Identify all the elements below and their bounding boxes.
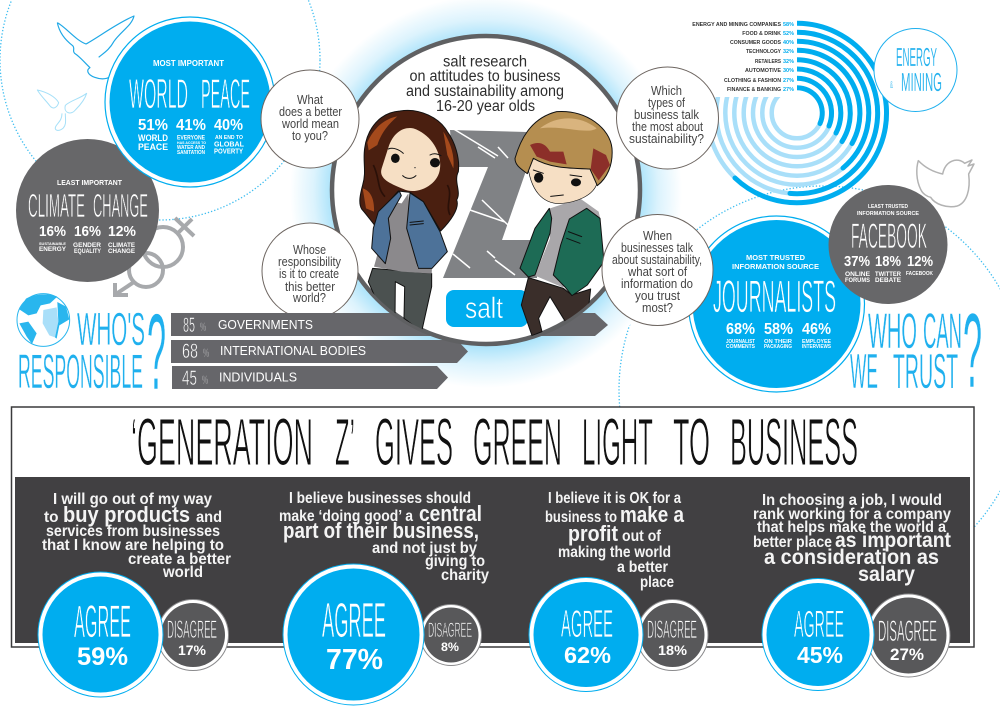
callout: energy and mining: MINING xyxy=(901,67,942,97)
icon: small dove xyxy=(37,90,87,130)
statement: buy products: buy products xyxy=(63,502,190,527)
title: salt research intro: and sustainability among xyxy=(406,83,564,100)
icon: gender symbols xyxy=(115,218,194,295)
result 3: disagree 18% xyxy=(637,600,708,670)
stat: 51% world peace: PEACE xyxy=(138,142,168,153)
statement: central part of business: make ‘doing good’ a xyxy=(279,508,413,525)
result 2: agree 77%: 77% xyxy=(326,644,383,676)
label: least trusted information source: INFORMATION SOURCE xyxy=(857,211,919,217)
title: salt research intro: on attitudes to business xyxy=(410,68,561,85)
question bubble: when businesses talk: you trust xyxy=(635,289,680,303)
arrow bar: international bodies xyxy=(171,340,468,363)
stat: 16% gender equality xyxy=(73,223,102,255)
stat: 12% climate change xyxy=(108,223,136,255)
question bubble: what does a better world mean: does a better xyxy=(279,105,342,119)
heading: climate change: CLIMATE xyxy=(28,187,85,224)
bar labels: responsibility percentages xyxy=(182,314,366,390)
title: generation z gives green light to business: Z’ xyxy=(335,405,355,480)
heading: who can we trust xyxy=(850,292,982,410)
heading: who's responsible xyxy=(18,291,166,412)
statement: buy products: world xyxy=(162,564,203,581)
statement: buy products xyxy=(42,491,231,581)
text: ? xyxy=(147,291,166,412)
result 1: agree 59%: AGREE xyxy=(74,596,131,647)
question bubble: when businesses talk: most? xyxy=(642,301,673,315)
chart labels: sectors and percentages: FOOD & DRINK xyxy=(742,31,781,37)
question bubble: which types of business: sustainability? xyxy=(629,132,704,146)
question bubble: which types of business: business talk xyxy=(634,108,700,122)
text: DISAGREE xyxy=(647,616,697,644)
statement: central part of business: I believe businesses should xyxy=(289,490,471,507)
title: salt research intro: 16-20 year olds xyxy=(436,98,535,115)
heading: who's responsible: WHO'S xyxy=(77,303,145,355)
question bubble: when businesses talk: about sustainability, xyxy=(612,253,702,267)
stat: 46% employee interviews: EMPLOYEE xyxy=(802,339,832,345)
icon: globe xyxy=(17,294,70,346)
statement: make a profit: a better xyxy=(617,559,668,576)
statement: as important as salary: as important xyxy=(835,529,951,552)
stat: 41% water and sanitation: HAS ACCESS TO xyxy=(177,141,206,145)
question bubble: whose responsibility: is it to create xyxy=(279,267,339,281)
statement: make a profit: out of xyxy=(622,528,662,545)
heading: world peace: WORLD xyxy=(129,70,188,117)
stat: 40% end to global poverty: POVERTY xyxy=(214,148,243,156)
result 3: agree 62%: 62% xyxy=(564,642,611,668)
statement: buy products: services from businesses xyxy=(46,523,220,540)
illustration: boy xyxy=(515,112,612,338)
stat: 12% facebook: 12% xyxy=(907,254,933,270)
stat: 40% end to global poverty xyxy=(214,117,244,156)
panel: most important xyxy=(105,17,275,187)
bar labels: responsibility percentages: 68 xyxy=(182,340,198,363)
label: most trusted information source: INFORMATION SOURCE xyxy=(732,262,819,271)
chart: business sustainability rings xyxy=(707,23,887,203)
chart labels: sectors and percentages: 27% xyxy=(783,78,794,84)
arrow bar: individuals xyxy=(172,366,448,389)
stat: 41% water and sanitation: EVERYONE xyxy=(177,136,205,142)
result 4: agree 45% xyxy=(762,578,874,690)
stat: 37% online forums xyxy=(844,254,870,284)
question bubble: when businesses talk: When xyxy=(643,229,672,243)
stat: 16% sustainable energy: 16% xyxy=(39,223,66,240)
stat: 16% sustainable energy: SUSTAINABLE xyxy=(39,242,66,246)
stat: 12% climate change: CLIMATE xyxy=(108,243,135,249)
heading: who can we trust: WE xyxy=(850,345,878,399)
result 1: agree 59% xyxy=(38,572,163,697)
illustration: girl xyxy=(360,110,459,332)
statement: as important as salary: rank working for a company xyxy=(753,506,951,523)
chart labels: sectors and percentages: TECHNOLOGY xyxy=(746,49,781,55)
result 4: agree 45%: 45% xyxy=(797,642,843,668)
result 4: disagree 27%: 27% xyxy=(890,645,924,664)
stat: 68% journalist comments: JOURNALIST xyxy=(726,339,755,345)
result 3: agree 62%: AGREE xyxy=(561,603,613,646)
stat: 18% twitter debate: DEBATE xyxy=(875,278,901,284)
statement: central part of business: central xyxy=(419,501,482,526)
statement: make a profit: place xyxy=(640,574,674,591)
statement: make a profit xyxy=(545,490,685,591)
icon: twitter bird xyxy=(917,160,974,207)
panel: central illustration circle xyxy=(332,36,640,344)
panel: least trusted xyxy=(828,185,948,304)
bar labels: responsibility percentages: 45 xyxy=(182,367,197,390)
arrow bar: governments xyxy=(171,313,608,336)
question bubble: which types of business: types of xyxy=(648,96,685,110)
graphic: grey letter z xyxy=(443,128,537,278)
question bubble: whose responsibility xyxy=(262,223,358,319)
panel: least important xyxy=(16,139,159,282)
chart labels: sectors and percentages: 52% xyxy=(783,31,794,37)
stat: 51% world peace: WORLD xyxy=(138,133,168,144)
bar labels: responsibility percentages: % xyxy=(200,320,206,334)
question bubble: whose responsibility: Whose xyxy=(293,243,326,257)
chart labels: sectors and percentages: 58% xyxy=(783,22,794,28)
stat: 41% water and sanitation: WATER AND xyxy=(177,145,205,151)
stat: 58% on their packaging: 58% xyxy=(764,321,793,338)
text: DISAGREE xyxy=(428,619,472,642)
statement: central part of business: part of their business, xyxy=(283,518,479,543)
question bubble: what does a better world mean xyxy=(261,70,359,168)
statement: as important as salary: salary xyxy=(858,563,915,586)
text: DISAGREE xyxy=(167,616,217,644)
stat: 16% sustainable energy xyxy=(39,223,67,253)
chart labels: sectors and percentages: 32% xyxy=(783,59,794,65)
statement: as important as salary: In choosing a job, I would xyxy=(762,492,942,509)
label: most trusted information source: MOST TRUSTED xyxy=(746,253,806,262)
stat: 16% gender equality: GENDER xyxy=(73,243,102,249)
bar labels: responsibility percentages: INDIVIDUALS xyxy=(219,370,297,384)
stat: 46% employee interviews: INTERVIEWS xyxy=(802,344,832,350)
stat: 40% end to global poverty: AN END TO xyxy=(215,135,243,141)
question bubble: whose responsibility: this better xyxy=(285,280,335,294)
chart labels: sectors and percentages: FINANCE & BANKING xyxy=(727,87,781,93)
statement: as important as salary: a consideration as xyxy=(764,546,939,569)
label: most important: MOST IMPORTANT xyxy=(153,59,224,68)
stat: 51% world peace: 51% xyxy=(138,117,168,134)
label: least important: LEAST IMPORTANT xyxy=(57,180,123,187)
stat: 41% water and sanitation: 41% xyxy=(176,117,206,134)
question bubble: when businesses talk: information do xyxy=(621,277,693,291)
chart labels: sectors and percentages: 40% xyxy=(783,40,794,46)
stat: 51% world peace xyxy=(138,117,168,153)
badge: salt logo: salt xyxy=(465,292,504,325)
chart labels: sectors and percentages: AUTOMOTIVE xyxy=(745,68,781,74)
statement: as important as salary: better place xyxy=(753,534,832,551)
result 2: agree 77% xyxy=(283,564,424,705)
statement: make a profit: I believe it is OK for a xyxy=(548,490,681,507)
question bubble: whose responsibility: responsibility xyxy=(278,255,342,269)
stat: 12% climate change: CHANGE xyxy=(108,249,135,255)
result 2: disagree 8%: 8% xyxy=(441,640,459,654)
stat: 37% online forums: FORUMS xyxy=(845,278,870,284)
result 3: agree 62% xyxy=(529,578,643,692)
result 1: agree 59%: 59% xyxy=(77,643,128,671)
question bubble: when businesses talk xyxy=(602,214,713,326)
title: salt research intro xyxy=(406,54,564,115)
result 4: disagree 27% xyxy=(867,594,950,677)
chart labels: sectors and percentages: 27% xyxy=(783,87,794,93)
chart labels: sectors and percentages: CONSUMER GOODS xyxy=(730,40,781,46)
stat: 41% water and sanitation: SANITATION xyxy=(177,150,205,156)
question bubble: when businesses talk: what sort of xyxy=(627,265,687,279)
bar labels: responsibility percentages: % xyxy=(202,373,208,387)
result 3: disagree 18%: 18% xyxy=(658,642,688,658)
result 2: agree 77%: AGREE xyxy=(322,594,386,648)
stat: 46% employee interviews: 46% xyxy=(802,321,831,338)
statement: buy products: to xyxy=(44,509,58,526)
statement: make a profit: business to xyxy=(545,509,617,526)
label: least trusted information source xyxy=(857,204,919,217)
question bubble: which types of business: Which xyxy=(651,84,682,98)
label: most trusted information source xyxy=(732,253,819,271)
result 2: disagree 8% xyxy=(420,604,482,666)
bar labels: responsibility percentages: % xyxy=(203,346,209,360)
statement: buy products: create a better xyxy=(128,551,231,568)
stat: 58% on their packaging: ON THEIR xyxy=(764,339,792,345)
stat: 18% twitter debate: TWITTER xyxy=(875,272,902,278)
bar labels: responsibility percentages: INTERNATIONAL BODIES xyxy=(220,343,366,358)
stat: 37% online forums: ONLINE xyxy=(845,272,870,278)
callout: energy and mining xyxy=(874,28,957,112)
question bubble: what does a better world mean: What xyxy=(297,93,323,107)
question bubble: when businesses talk: businesses talk xyxy=(621,241,694,255)
callout: energy and mining: & xyxy=(890,80,893,91)
text: RESPONSIBLE xyxy=(18,346,143,399)
title: generation z gives green light to business xyxy=(131,405,858,480)
panel: generation z results xyxy=(12,405,974,647)
title: generation z gives green light to business: TO xyxy=(673,405,710,480)
stat: 37% online forums: 37% xyxy=(844,254,870,270)
statement: as important as salary xyxy=(753,492,951,586)
statement: buy products: and xyxy=(196,509,222,526)
statement: central part of business: charity xyxy=(441,567,489,584)
question bubble: what does a better world mean: world mean xyxy=(281,117,339,131)
question bubble: which types of business xyxy=(616,67,718,169)
statement: buy products: I will go out of my way xyxy=(53,491,212,508)
panel: most important: PEACE xyxy=(201,70,250,117)
stat: 40% end to global poverty: GLOBAL xyxy=(214,140,244,148)
statement: make a profit: profit xyxy=(568,521,619,546)
question bubble: whose responsibility: world? xyxy=(292,291,326,305)
statement: make a profit: making the world xyxy=(558,544,671,561)
stat: 12% facebook xyxy=(906,254,933,277)
stat: 16% gender equality: EQUALITY xyxy=(74,249,101,255)
stat: 16% gender equality: 16% xyxy=(74,223,101,240)
title: generation z gives green light to business: GREEN xyxy=(473,405,562,480)
bar labels: responsibility percentages: 85 xyxy=(183,314,195,337)
stat: 41% water and sanitation xyxy=(176,117,206,156)
stat: 16% sustainable energy: ENERGY xyxy=(39,246,67,253)
text: CHANGE xyxy=(93,187,148,224)
title: generation z gives green light to business: ‘GENERATION xyxy=(131,405,313,480)
stat: 40% end to global poverty: 40% xyxy=(214,117,243,134)
stat: 68% journalist comments xyxy=(726,321,756,350)
stat: 68% journalist comments: COMMENTS xyxy=(726,344,756,350)
result 1: disagree 17% xyxy=(158,600,228,670)
panel: most trusted xyxy=(688,216,864,392)
title: salt research intro: salt research xyxy=(443,54,527,70)
stat: 18% twitter debate: 18% xyxy=(875,254,901,270)
statement: central part of business: and not just by xyxy=(372,540,477,557)
statement: central part of business: giving to xyxy=(425,553,485,570)
stat: 12% facebook: FACEBOOK xyxy=(906,271,933,277)
title: generation z gives green light to business: LIGHT xyxy=(582,405,653,480)
label: least trusted information source: LEAST TRUSTED xyxy=(868,204,908,210)
title: generation z gives green light to business: GIVES xyxy=(375,405,453,480)
statement: buy products: that I know are helping to xyxy=(42,537,224,554)
stat: 58% on their packaging xyxy=(764,321,793,350)
stat: 18% twitter debate xyxy=(875,254,902,284)
question bubble: which types of business: the most about xyxy=(632,120,703,134)
chart labels: sectors and percentages xyxy=(692,22,794,93)
statement: central part of business xyxy=(279,490,489,584)
statement: as important as salary: that helps make the world a xyxy=(757,519,946,536)
chart labels: sectors and percentages: ENERGY AND MINING COMPANIES xyxy=(692,22,781,28)
question bubble: what does a better world mean: to you? xyxy=(292,129,328,143)
bar labels: responsibility percentages: GOVERNMENTS xyxy=(218,317,313,332)
heading: who can we trust: WHO xyxy=(868,303,917,359)
chart labels: sectors and percentages: CLOTHING & FASHION xyxy=(724,78,781,84)
result 1: disagree 17%: 17% xyxy=(178,642,207,658)
chart labels: sectors and percentages: 30% xyxy=(783,68,794,74)
icon: large dove xyxy=(57,16,134,79)
stat: 68% journalist comments: 68% xyxy=(726,321,755,338)
statement: make a profit: make a xyxy=(620,502,685,527)
badge: salt logo xyxy=(446,290,528,327)
chart labels: sectors and percentages: RETAILERS xyxy=(755,59,781,65)
chart labels: sectors and percentages: 32% xyxy=(783,49,794,55)
stat: 58% on their packaging: PACKAGING xyxy=(764,344,792,350)
stat: 46% employee interviews xyxy=(802,321,832,350)
result 4: agree 45%: AGREE xyxy=(794,604,844,646)
stat: 12% climate change: 12% xyxy=(108,223,136,240)
